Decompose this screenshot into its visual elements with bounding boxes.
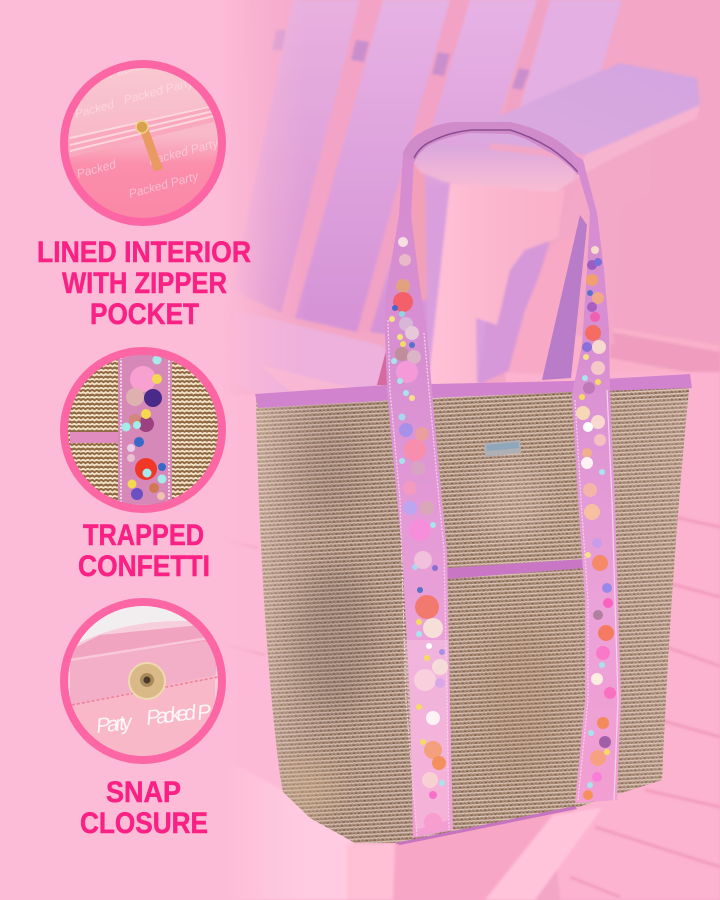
top handle loop: [403, 122, 585, 175]
heading: lined interior with zipper pocket: LINED INTERIOR: [37, 236, 251, 269]
heading: snap closure: CLOSURE: [80, 807, 208, 840]
circle photo: magnetic snap: Pa: [196, 699, 224, 725]
left strap: [385, 155, 453, 838]
circle photo: zipper pocket: Packed Party: [127, 169, 201, 201]
tote bag: [255, 122, 692, 845]
heading: snap closure: [80, 776, 208, 840]
left strap confetti: [389, 237, 448, 831]
heading: trapped confetti: TRAPPED: [83, 519, 204, 552]
feature 3: snap closure: [60, 598, 230, 840]
heading: trapped confetti: [78, 519, 210, 583]
circle photo: zipper pocket: [60, 60, 226, 226]
circle photo: magnetic snap: [60, 598, 230, 770]
seat and lower chair: [225, 310, 720, 900]
deck board lines: [225, 517, 720, 897]
right strap: [570, 152, 621, 803]
circle photo: zipper pocket: Packed: [73, 97, 116, 121]
right strap confetti: [576, 246, 616, 800]
pocket edge: [447, 559, 585, 579]
circle photo: magnetic snap: Party: [95, 711, 135, 738]
feature 1: lined interior: [37, 49, 251, 331]
bag top trim: [255, 374, 692, 408]
metal logo plate: [484, 440, 521, 457]
heading: snap closure: SNAP: [106, 776, 181, 809]
circle photo: magnetic snap: Packed: [145, 701, 199, 730]
heading: trapped confetti: CONFETTI: [78, 550, 210, 583]
circle photo: zipper pocket: Packed Party: [147, 136, 221, 168]
circle photo: zipper pocket: Packed: [75, 157, 118, 181]
bag body: [256, 380, 690, 845]
feature 2: trapped confetti: [60, 347, 230, 583]
chair back slats: [215, 0, 622, 340]
heading: lined interior with zipper pocket: [37, 236, 251, 331]
heading: lined interior with zipper pocket: WITH ZIPPER: [62, 267, 227, 300]
heading: lined interior with zipper pocket: POCKET: [90, 298, 199, 331]
panel background left with fade: [0, 0, 307, 900]
circle photo: confetti strap: [60, 347, 230, 513]
back handle: [377, 215, 587, 385]
circle photo: zipper pocket: Packed Party: [122, 75, 196, 107]
chair arm rest: [408, 63, 700, 385]
circle photo: zipper pocket: Packed Party: [107, 49, 181, 81]
